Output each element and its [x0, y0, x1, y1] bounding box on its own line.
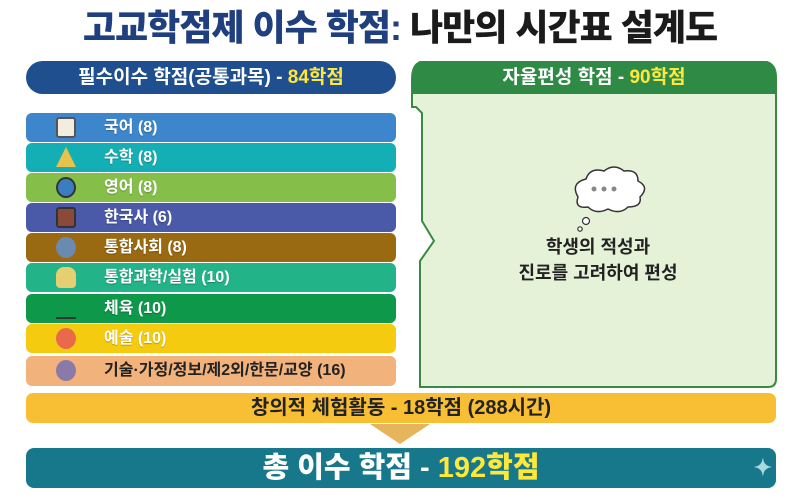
bar: creative activities	[26, 393, 776, 423]
row: 통합사회	[26, 233, 396, 262]
row: 영어	[26, 173, 396, 202]
arrow: down	[370, 424, 430, 444]
title: 고교학점제 이수 학점: 나만의 시간표 설계도	[83, 7, 717, 48]
text: elective description	[518, 237, 678, 283]
row: 기술·가정: 기술·가정/정보/제2외/한문/교양 (16)	[104, 362, 346, 379]
subject list	[26, 113, 396, 386]
bar: total credits: ✦	[754, 455, 772, 480]
row: 수학: 수학 (8)	[104, 149, 157, 166]
row: 수학	[26, 143, 396, 172]
bar: total credits	[26, 448, 776, 488]
row: 체육: 체육 (10)	[104, 300, 166, 317]
row: 통합사회: 통합사회 (8)	[104, 239, 187, 256]
row: 한국사	[26, 203, 396, 232]
bar: total credits: 총 이수 학점 - 192학점	[262, 452, 540, 484]
bar: creative activities: 창의적 체험활동 - 18학점 (288시간)	[251, 397, 551, 419]
row: 국어: 국어 (8)	[104, 119, 157, 136]
row: 예술: 예술 (10)	[104, 330, 166, 347]
text: elective description: 학생의 적성과	[546, 237, 650, 257]
row: 기술·가정	[26, 356, 396, 386]
row: 체육	[26, 294, 396, 323]
row: 통합과학/실험	[26, 263, 396, 292]
header: required credits: 필수이수 학점(공통과목) - 84학점	[78, 67, 344, 88]
icon: thought cloud	[575, 167, 645, 231]
row: 국어	[26, 113, 396, 142]
header: elective credits: 자율편성 학점 - 90학점	[502, 67, 686, 88]
header: required credits	[26, 61, 396, 94]
text: elective description: 진로를 고려하여 편성	[518, 263, 678, 283]
row: 통합과학/실험: 통합과학/실험 (10)	[104, 269, 230, 286]
row: 예술	[26, 324, 396, 353]
row: 영어: 영어 (8)	[104, 179, 157, 196]
row: 한국사: 한국사 (6)	[104, 209, 172, 226]
panel: elective area	[411, 61, 777, 388]
